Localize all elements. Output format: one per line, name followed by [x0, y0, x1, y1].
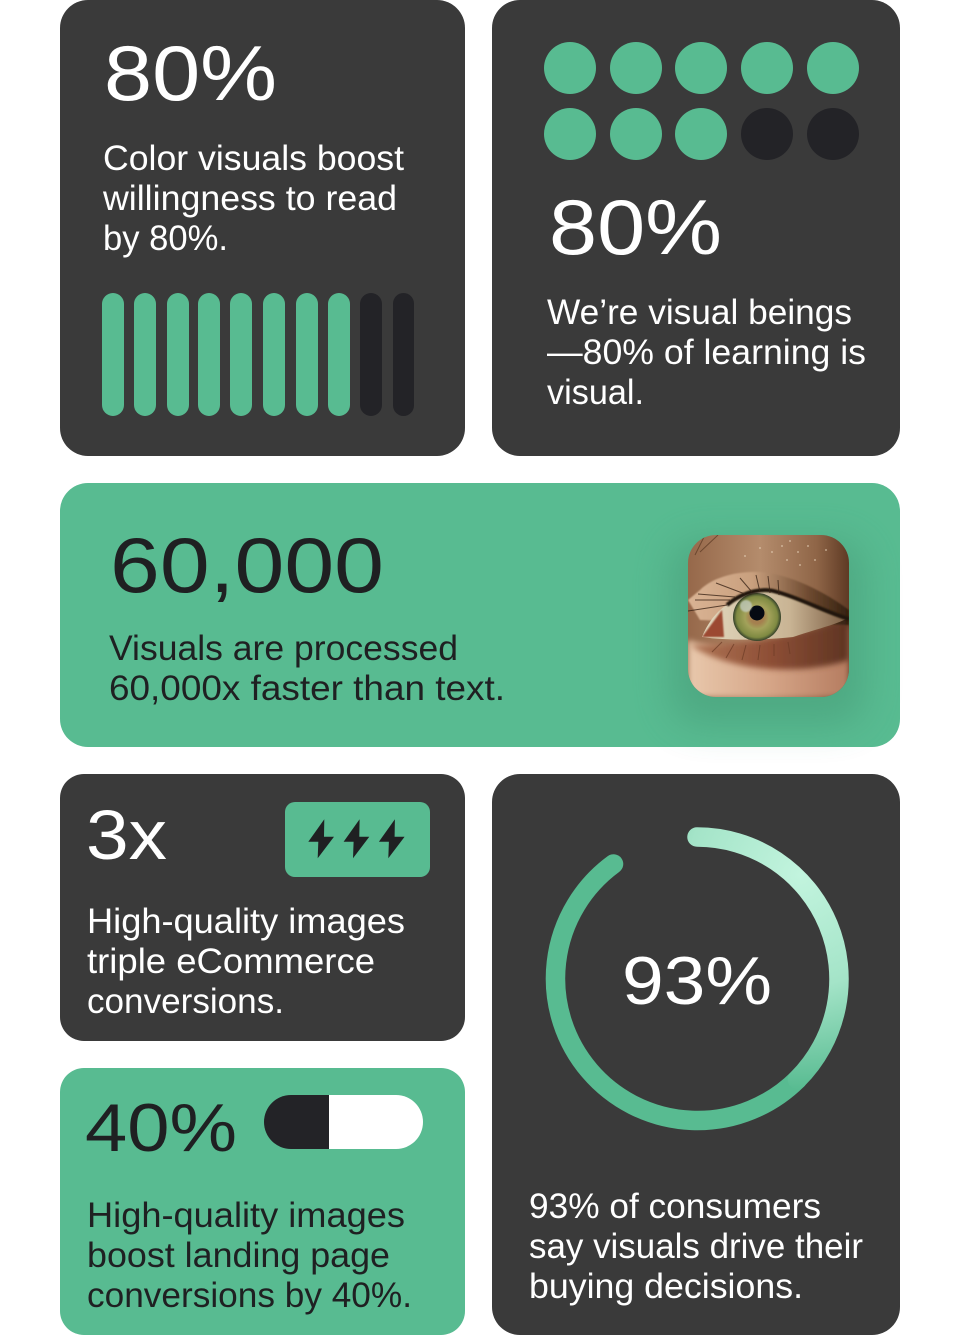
panel: visual learning [492, 0, 900, 456]
text block: visual learning description: We’re visual beings [547, 293, 852, 332]
text block: ecommerce description: conversions. [87, 982, 284, 1021]
text block: visual learning description: —80% of learning is [547, 333, 866, 372]
text block: buying decisions description: 93% of consumers [529, 1187, 821, 1226]
stat: 40%: 40% [85, 1090, 237, 1166]
text block: landing page description: boost landing page [87, 1236, 390, 1275]
stat: 80%: 80% [104, 29, 277, 117]
text block: color visuals description [102, 139, 404, 258]
text block: landing page description: conversions by 40%. [87, 1276, 412, 1315]
panel: landing page conversions [60, 1068, 465, 1335]
panel: consumer buying decisions [492, 774, 900, 1335]
text block: visual learning description: visual. [547, 373, 644, 412]
bar chart: 8 of 10 bars filled [102, 293, 414, 416]
chart: 93 percent progress ring [555, 837, 839, 1121]
stat: 80%: 80% [549, 183, 722, 271]
text block: color visuals description: Color visuals boost [103, 139, 404, 178]
text block: ecommerce description: High-quality images [87, 902, 405, 941]
text block: processing description: Visuals are processed [109, 629, 458, 668]
stat: 93%: 93% [622, 943, 772, 1019]
text block: ecommerce description: triple eCommerce [87, 942, 375, 981]
text block: color visuals description: by 80%. [103, 219, 228, 258]
image: close-up of an eye [670, 525, 865, 725]
panel: triple ecommerce conversions [60, 774, 465, 1041]
panel: color visuals boost willingness to read [60, 0, 465, 456]
text block: visual learning description [547, 293, 866, 412]
text block: ecommerce description [87, 902, 405, 1021]
icon: 40 percent pill gauge [264, 1095, 423, 1149]
stat: 3x: 3x [86, 796, 167, 874]
text block: buying decisions description: say visuals drive their [529, 1227, 863, 1266]
text block: color visuals description: willingness to read [102, 179, 397, 218]
stat: 60,000: 60,000 [110, 521, 384, 609]
text block: buying decisions description [529, 1187, 863, 1306]
text block: landing page description: High-quality images [87, 1196, 405, 1235]
text block: processing description: 60,000x faster than text. [109, 669, 505, 708]
text block: landing page description [87, 1196, 412, 1315]
text block: buying decisions description: buying decisions. [529, 1267, 803, 1306]
text block: processing description [109, 629, 505, 708]
dot chart: 8 of 10 dots filled [544, 42, 859, 160]
badge: three lightning bolts [285, 802, 430, 877]
panel: visuals processed faster [60, 483, 900, 747]
